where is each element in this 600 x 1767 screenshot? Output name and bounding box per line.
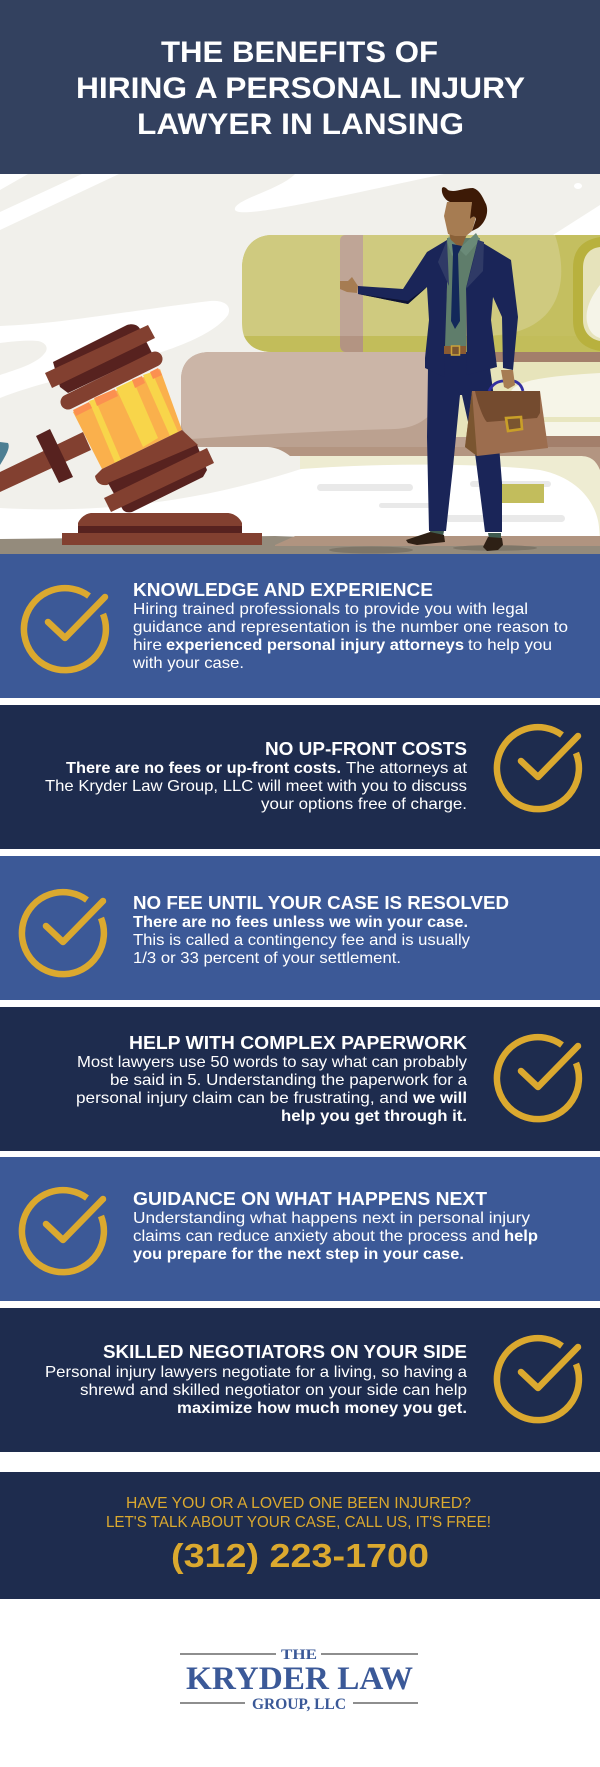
- icon: check circle: [497, 1037, 579, 1119]
- call to action text: HAVE YOU OR A LOVED ONE BEEN INJURED?: [126, 1495, 471, 1512]
- icon: check circle: [497, 727, 579, 809]
- title: LAWYER IN LANSING: [137, 108, 464, 141]
- text: knowledge and experience: hire: [133, 637, 162, 654]
- text: complex paperwork: be said in 5. Understanding the paperwork for a: [110, 1072, 467, 1089]
- call to action panel: [0, 1472, 600, 1599]
- panel: skilled negotiators: [0, 1308, 600, 1452]
- logo: [180, 1647, 418, 1713]
- grey swoosh: [160, 447, 301, 490]
- title: HIRING A PERSONAL INJURY: [76, 72, 525, 105]
- text: no fee until resolved: There are no fees unless we win your case.: [133, 914, 468, 931]
- text: skilled negotiators: SKILLED NEGOTIATORS ON YOUR SIDE: [103, 1341, 467, 1362]
- text: no up-front costs: NO UP-FRONT COSTS: [265, 738, 467, 759]
- icon: tan book: [181, 352, 600, 456]
- text: guidance on what happens next: GUIDANCE ON WHAT HAPPENS NEXT: [133, 1188, 488, 1209]
- text: skilled negotiators: shrewd and skilled negotiator on your side can help: [80, 1382, 467, 1399]
- text: no fee until resolved: 1/3 or 33 percent of your settlement.: [133, 950, 401, 967]
- text: skilled negotiators: [45, 1341, 467, 1417]
- icon: white open book: [0, 447, 600, 540]
- text: skilled negotiators: maximize how much money you get.: [177, 1400, 467, 1417]
- text: knowledge and experience: KNOWLEDGE AND EXPERIENCE: [133, 579, 433, 600]
- text: guidance on what happens next: Understanding what happens next in personal injury: [133, 1210, 530, 1227]
- text: no up-front costs: The attorneys at: [346, 760, 468, 777]
- title: [76, 36, 525, 141]
- text: guidance on what happens next: you prepare for the next step in your case.: [133, 1246, 464, 1263]
- text: complex paperwork: HELP WITH COMPLEX PAPERWORK: [129, 1032, 468, 1053]
- text: complex paperwork: Most lawyers use 50 words to say what can probably: [77, 1054, 467, 1071]
- text: complex paperwork: personal injury claim can be frustrating, and: [76, 1090, 408, 1107]
- text: no up-front costs: The Kryder Law Group, LLC will meet with you to discuss: [45, 778, 467, 795]
- icon: check circle: [24, 588, 106, 670]
- text: knowledge and experience: with your case.: [132, 655, 244, 672]
- call to action text: LET'S TALK ABOUT YOUR CASE, CALL US, IT'S FREE!: [106, 1514, 491, 1531]
- logo: THE: [281, 1647, 317, 1663]
- text: knowledge and experience: [132, 579, 568, 672]
- text: no fee until resolved: This is called a contingency fee and is usually: [133, 932, 470, 949]
- icon: check circle: [497, 1338, 579, 1420]
- text: complex paperwork: [76, 1032, 468, 1125]
- text: skilled negotiators: Personal injury lawyers negotiate for a living, so having a: [45, 1364, 467, 1381]
- text: guidance on what happens next: help: [504, 1228, 538, 1245]
- phone number: (312) 223-1700: [171, 1537, 429, 1574]
- text: complex paperwork: help you get through it.: [281, 1108, 467, 1125]
- title: THE BENEFITS OF: [161, 36, 438, 69]
- call to action text: [106, 1495, 491, 1531]
- logo: GROUP, LLC: [252, 1696, 346, 1713]
- icon: green book: [242, 235, 600, 352]
- panel: no up-front costs: [0, 705, 600, 849]
- icon: check circle: [22, 1190, 104, 1272]
- floor: [0, 536, 600, 554]
- text: knowledge and experience: to help you: [468, 637, 552, 654]
- icon: lawyer figure: [340, 187, 548, 551]
- hero illustration: [0, 174, 600, 554]
- text: guidance on what happens next: [133, 1188, 538, 1263]
- text: knowledge and experience: guidance and representation is the number one reason to: [133, 619, 568, 636]
- text: no fee until resolved: [133, 892, 509, 967]
- icon: check circle: [22, 892, 104, 974]
- text: complex paperwork: we will: [412, 1090, 467, 1107]
- text: no fee until resolved: NO FEE UNTIL YOUR CASE IS RESOLVED: [133, 892, 509, 913]
- panel: complex paperwork: [0, 1007, 600, 1151]
- panel: knowledge and experience: [0, 554, 600, 698]
- text: no up-front costs: your options free of charge.: [261, 796, 467, 813]
- header panel: [0, 0, 600, 174]
- icon: gavel: [0, 324, 262, 545]
- text: knowledge and experience: Hiring trained professionals to provide you with legal: [133, 601, 528, 618]
- panel: guidance on what happens next: [0, 1157, 600, 1301]
- text: knowledge and experience: experienced personal injury attorneys: [166, 637, 464, 654]
- text: no up-front costs: There are no fees or up-front costs.: [66, 760, 341, 777]
- text: no up-front costs: [45, 738, 468, 813]
- text: guidance on what happens next: claims can reduce anxiety about the process and: [133, 1228, 500, 1245]
- panel: no fee until resolved: [0, 856, 600, 1000]
- logo: KRYDER LAW: [186, 1661, 413, 1697]
